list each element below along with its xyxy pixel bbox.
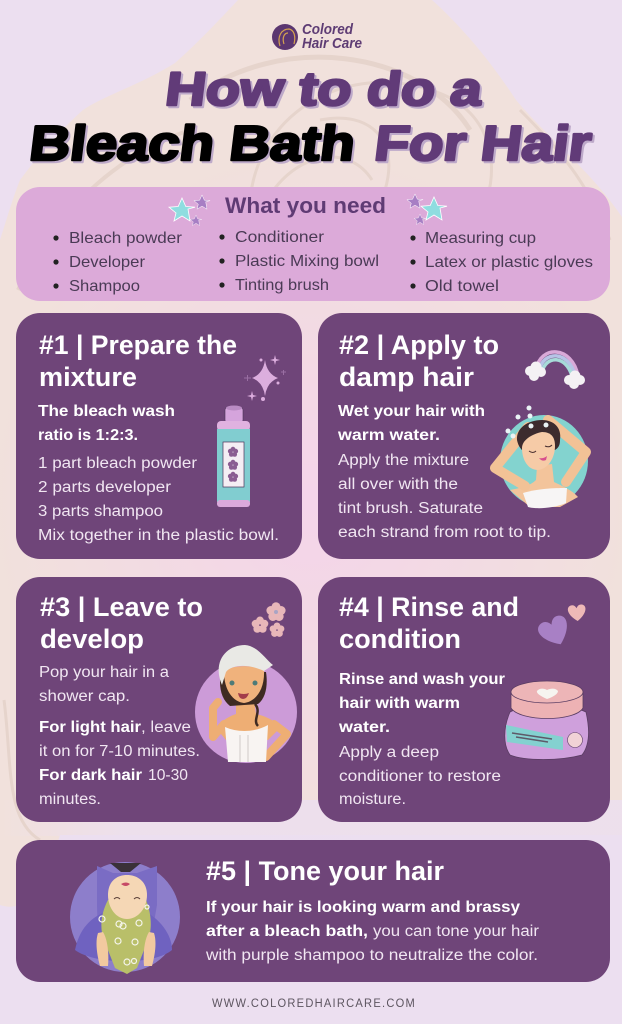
footer url: WWW.COLOREDHAIRCARE.COM (212, 998, 416, 1010)
heading: step 4: #4 | Rinse and (339, 592, 519, 622)
logo name: Colored (302, 21, 354, 38)
text: step 5 body: If your hair is looking warm and brassy (206, 899, 520, 916)
list: column 1: Shampoo (69, 278, 140, 295)
icon: sparkles (244, 355, 286, 401)
panel: step 4 (318, 577, 610, 822)
text: step 3 body: minutes. (39, 791, 101, 808)
illustration: woman applying mixture (495, 406, 588, 508)
title: Bleach Bath (27, 116, 358, 171)
text: step 1 body: 1 part bleach powder (38, 455, 197, 472)
list: column 2 (219, 229, 379, 294)
logo name: Hair Care (302, 35, 362, 52)
text: step 4 body: conditioner to restore (339, 768, 501, 785)
text: step 3 body: it on for 7-10 minutes. (39, 743, 200, 760)
text: step 2 body: warm water. (337, 427, 440, 444)
heading: step 4: condition (339, 624, 461, 654)
illustration: woman rinsing hair (70, 862, 180, 974)
text: step 1 body: Mix together in the plastic bowl. (38, 527, 279, 544)
illustration: woman with towel (195, 645, 297, 763)
text: step 5 body (205, 899, 539, 964)
panel: step 1 (16, 313, 302, 559)
text: step 3 body: For light hair (39, 719, 141, 736)
panel: what you need (16, 187, 610, 301)
text: step 2 body: each strand from root to tip. (338, 524, 551, 541)
list: column 2: Plastic Mixing bowl (235, 253, 379, 270)
text: step 4 body: Rinse and wash your (339, 671, 505, 688)
text: step 4 body: water. (338, 719, 390, 736)
heading: step 4 (339, 592, 519, 654)
title: For Hair (372, 116, 594, 171)
text: step 2 body: all over with the (338, 476, 458, 493)
heading: step 3 (40, 592, 203, 654)
text: step 3 body: shower cap. (39, 688, 130, 705)
icon: flowers (252, 602, 286, 637)
icon: bottle (217, 406, 250, 507)
icon: stars right (407, 194, 447, 224)
heading: step 2: #2 | Apply to (339, 330, 499, 360)
list: column 1 (53, 230, 183, 295)
text: step 3 body: , leave (141, 719, 191, 736)
list: column 3: Latex or plastic gloves (425, 254, 593, 271)
text: step 2 body: Wet your hair with (338, 403, 485, 420)
text: step 4 body (338, 671, 505, 808)
text: step 1 body: 2 parts developer (38, 479, 171, 496)
heading: step 5: #5 | Tone your hair (206, 856, 444, 886)
text: step 5 body: you can tone your hair (373, 923, 539, 940)
title: How to do a (163, 62, 486, 115)
text: step 5 body: with purple shampoo to neutralize the color. (205, 947, 538, 964)
heading: what you need: What you need (225, 193, 386, 218)
text: step 1 body: The bleach wash (38, 403, 175, 420)
text: step 4 body: moisture. (339, 791, 406, 808)
icon: hearts (536, 604, 586, 651)
heading: step 2: damp hair (339, 362, 475, 392)
panel: step 3 (16, 577, 302, 822)
text: step 3 body: Pop your hair in a (39, 664, 169, 681)
heading: step 1: mixture (39, 362, 137, 392)
text: step 2 body (337, 403, 551, 541)
text: step 3 body: For dark hair (39, 767, 142, 784)
list: column 3 (410, 230, 593, 295)
text: step 4 body: Apply a deep (339, 744, 439, 761)
text: step 3 body: 10-30 (148, 767, 188, 784)
list: column 3: Old towel (425, 278, 499, 295)
text: step 3 body (39, 664, 200, 808)
heading: step 1: #1 | Prepare the (39, 330, 237, 360)
text: step 4 body: hair with warm (339, 695, 460, 712)
heading: step 3: develop (40, 624, 144, 654)
heading: step 2 (339, 330, 499, 392)
logo name (302, 21, 362, 52)
list: column 1: Bleach powder (69, 230, 183, 247)
icon: conditioner jar (505, 681, 589, 760)
text: step 2 body: tint brush. Saturate (338, 500, 483, 517)
list: column 2: Conditioner (235, 229, 325, 246)
icon: rainbow (525, 352, 585, 389)
list: column 1: Developer (69, 254, 146, 271)
list: column 2: Tinting brush (235, 277, 329, 294)
text: step 2 body: Apply the mixture (338, 452, 469, 469)
title (27, 62, 594, 171)
text: step 5 body: after a bleach bath, (206, 923, 368, 940)
text: step 1 body (38, 403, 279, 544)
heading: step 1 (39, 330, 237, 392)
icon: stars left (169, 195, 210, 226)
logo mark (272, 24, 298, 50)
text: step 1 body: ratio is 1:2:3. (38, 427, 138, 444)
text: step 1 body: 3 parts shampoo (38, 503, 163, 520)
panel: step 2 (318, 313, 610, 559)
panel: step 5 (16, 840, 610, 982)
logo (272, 21, 362, 52)
list: column 3: Measuring cup (425, 230, 536, 247)
heading: step 3: #3 | Leave to (40, 592, 203, 622)
